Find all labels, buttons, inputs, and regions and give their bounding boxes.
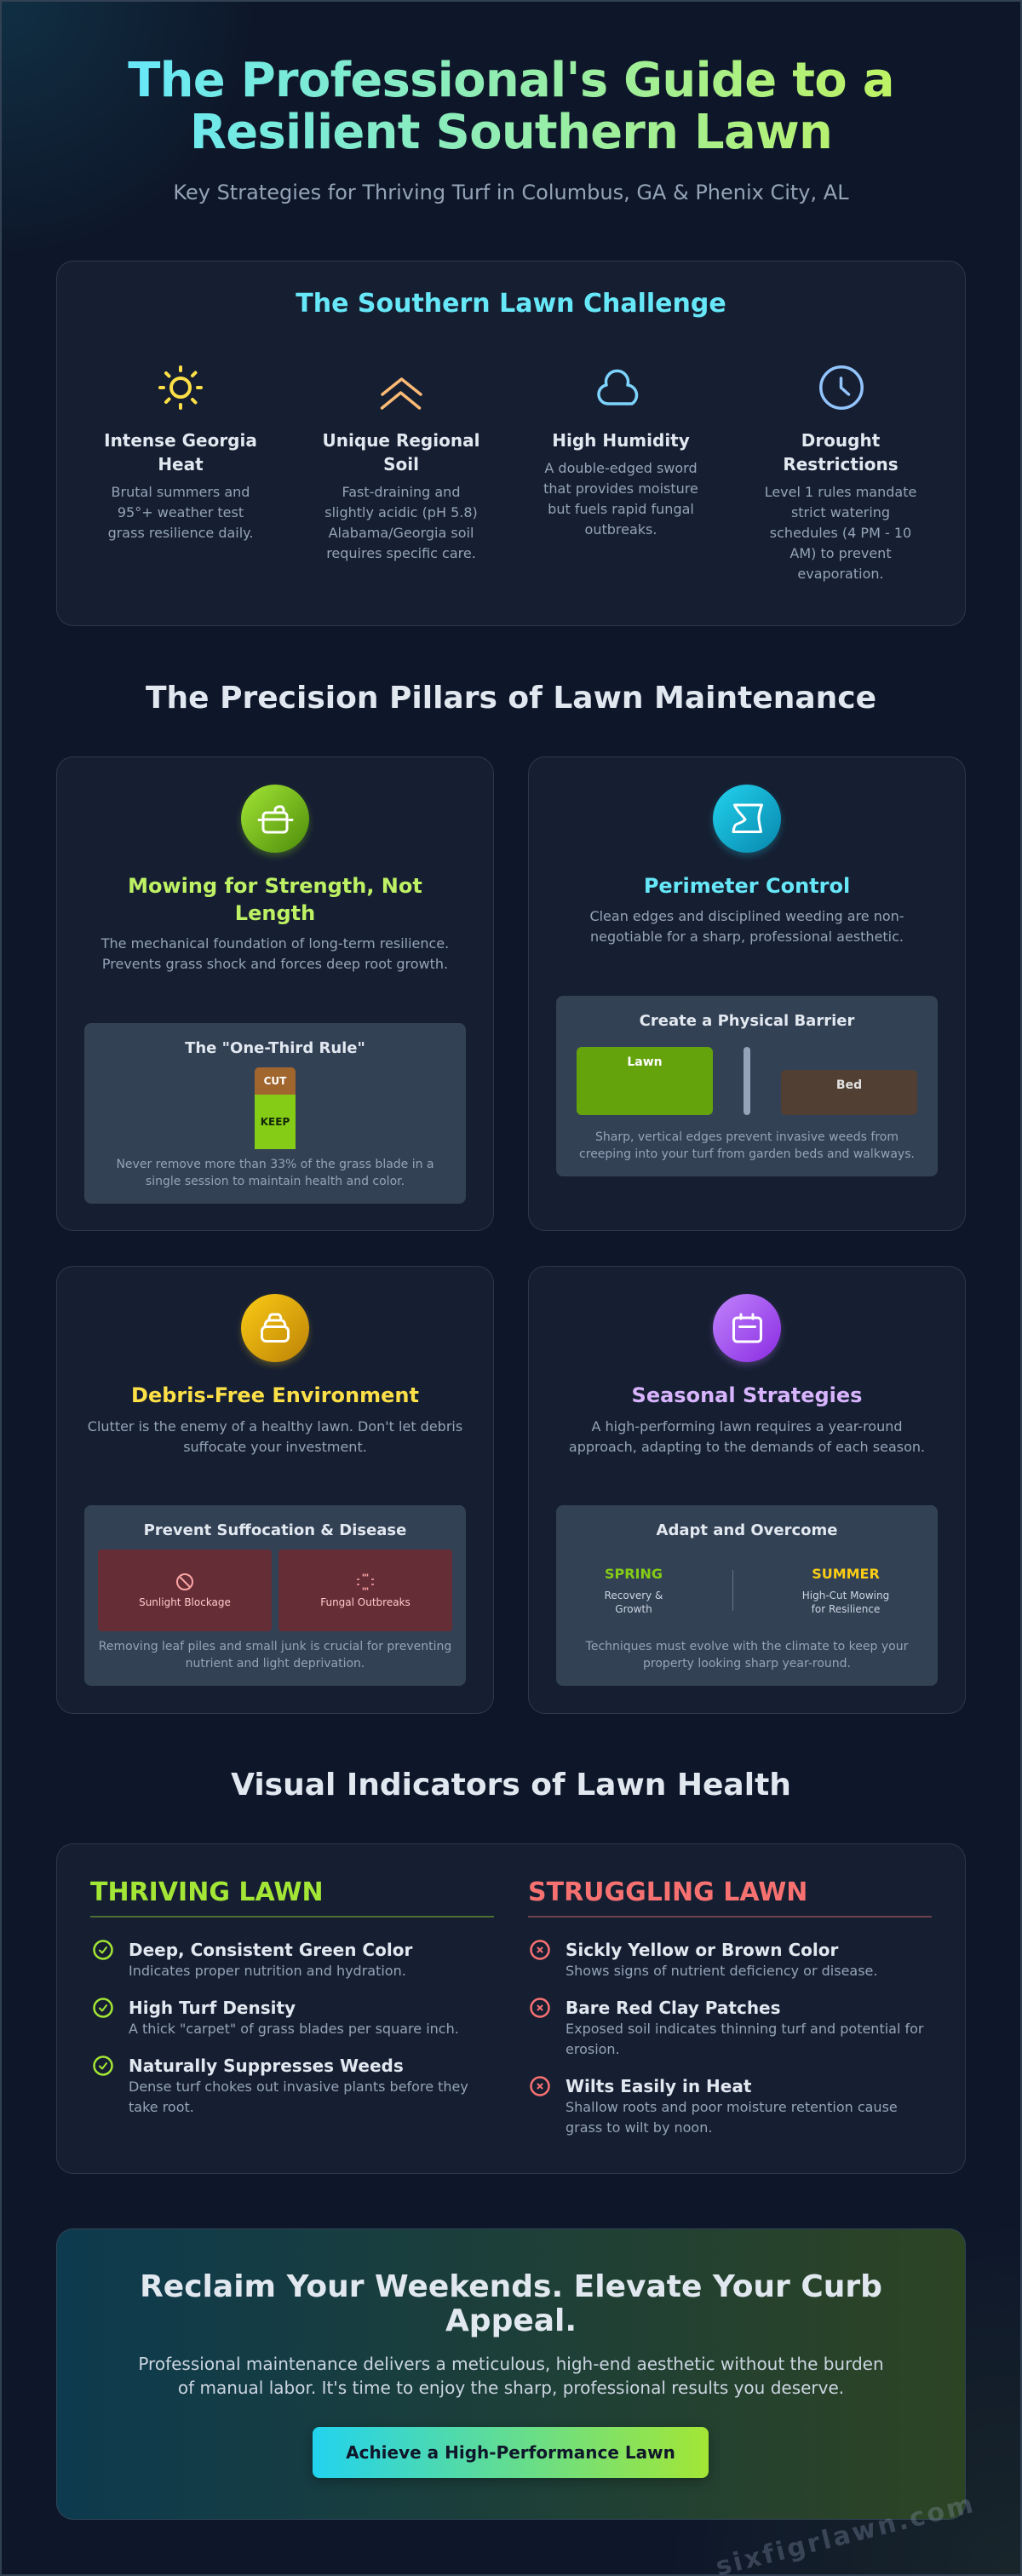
text: cta: Professional maintenance delivers a meticulous, high-end aesthetic without the burden [138,2354,884,2374]
indicator: suppresses weeds [93,2056,468,2115]
panel: lawn health comparison [56,1843,966,2174]
tile: fungal outbreaks [278,1550,452,1631]
button [313,2427,709,2478]
diagram title: Create a Physical Barrier [640,1012,854,1030]
description: perimeter: negotiable for a sharp, professional aesthetic. [590,929,904,945]
challenge item: drought: evaporation. [797,566,884,582]
caption: Never remove more than 33% of the grass blade in a [116,1158,434,1171]
diagram title: Adapt and Overcome [657,1521,837,1539]
icon: check [93,1998,113,2018]
cut segment: CUT [264,1075,286,1087]
caption: Techniques must evolve with the climate to keep your [586,1640,908,1653]
indicator: green color: Deep, Consistent Green Color [129,1940,412,1960]
description: seasonal: A high-performing lawn requires a year-round [591,1418,903,1435]
description: perimeter [589,908,904,945]
season: spring: Growth [615,1603,652,1615]
season: spring: SPRING [605,1566,663,1582]
panel: the southern lawn challenge [56,261,966,626]
indicator: turf density: High Turf Density [129,1998,296,2018]
heading: mowing: Mowing for Strength, Not [128,874,422,898]
challenge item: heat: grass resilience daily. [108,525,253,541]
caption: single session to maintain health and color. [146,1175,405,1188]
icon: bag [241,1294,309,1362]
tile: fungal outbreaks: Fungal Outbreaks [320,1596,411,1608]
challenge item: drought: strict watering [791,504,890,520]
bed block [781,1070,917,1115]
challenge item: drought: AM) to prevent [789,545,892,561]
challenge item: drought: Drought [801,430,880,451]
lawn block [577,1047,713,1115]
description: mowing [100,935,449,972]
challenge item: heat: Heat [158,454,204,474]
text: cta: of manual labor. It's time to enjoy the sharp, professional results you deserve. [178,2378,844,2398]
indicator: wilts in heat: grass to wilt by noon. [566,2119,712,2136]
description: mowing: Prevents grass shock and forces deep root growth. [102,956,448,972]
icon: edging [713,785,781,853]
challenge item: soil: Unique Regional [323,430,479,451]
icon: mower [241,785,309,853]
indicator: suppresses weeds: Naturally Suppresses Weeds [129,2056,404,2076]
panel: call to action [56,2228,966,2520]
icon: double chevron [380,377,422,410]
indicator: wilts in heat [530,2076,898,2136]
indicator: green color: Indicates proper nutrition and hydration. [129,1963,406,1979]
divider: seasons [732,1570,733,1611]
heading: cta [140,2269,882,2338]
icon: spore ring [357,1574,374,1590]
indicator: green color [93,1940,412,1979]
challenge item: heat: 95°+ weather test [118,504,244,520]
challenge item: soil: Soil [383,454,419,474]
challenge item: soil [323,377,479,561]
challenge item: drought: Level 1 rules mandate [765,484,916,500]
icon: cross [530,1998,550,2018]
heading: cta: Reclaim Your Weekends. Elevate Your Curb [140,2269,882,2304]
caption: creeping into your turf from garden beds and walkways. [579,1147,915,1161]
title: The Professional's Guide to a [128,53,894,108]
caption: nutrient and light deprivation. [186,1657,365,1670]
challenge item: heat [104,365,257,541]
season: spring: Recovery & [605,1590,663,1601]
icon: cross [530,1940,550,1960]
title [128,53,894,160]
icon: clock [819,365,864,410]
diagram title: Prevent Suffocation & Disease [144,1521,406,1539]
heading: debris: Debris-Free Environment [131,1383,419,1407]
diagram: one-third rule [84,1023,466,1204]
indicator: yellow color: Sickly Yellow or Brown Color [566,1940,838,1960]
panel: debris-free [56,1266,494,1714]
rule: struggling [528,1916,932,1918]
indicator: clay patches: erosion. [566,2041,620,2057]
challenge item: humidity: A double-edged sword [544,460,698,476]
indicator: suppresses weeds: take root. [129,2099,194,2115]
keep segment [255,1095,296,1149]
indicator: wilts in heat: Wilts Easily in Heat [566,2076,751,2096]
heading: thriving: THRIVING LAWN [90,1877,324,1907]
season: summer: High-Cut Mowing [802,1590,889,1601]
description: debris [88,1418,462,1455]
icon: cloud [597,370,639,405]
description: mowing: The mechanical foundation of long-term resilience. [101,935,449,952]
challenge item: soil: Alabama/Georgia soil [329,525,474,541]
challenge item: heat: Brutal summers and [112,484,250,500]
barrier [744,1047,750,1115]
icon: sun [158,365,203,410]
challenge item: humidity [543,370,698,538]
caption: Sharp, vertical edges prevent invasive weeds from [595,1130,899,1144]
indicator: clay patches: Exposed soil indicates thinning turf and potential for [566,2021,923,2037]
challenge item: soil: requires specific care. [326,545,476,561]
panel: mowing [56,756,494,1231]
challenge item: soil: Fast-draining and [342,484,460,500]
icon: check [93,2056,113,2076]
keep segment: KEEP [261,1116,290,1128]
heading: cta: Appeal. [445,2303,577,2338]
description: debris: suffocate your investment. [183,1439,367,1455]
indicator: clay patches: Bare Red Clay Patches [566,1998,781,2018]
challenge item: humidity: that provides moisture [543,480,698,497]
season: summer [802,1566,889,1615]
challenge item: humidity: High Humidity [552,430,690,451]
caption [586,1640,908,1670]
caption: Removing leaf piles and small junk is crucial for preventing [99,1640,451,1653]
icon: check [93,1940,113,1960]
season: spring [605,1566,663,1615]
indicator: turf density [93,1998,459,2037]
heading: visual indicators: Visual Indicators of Lawn Health [231,1768,791,1803]
season: summer: for Resilience [812,1603,880,1615]
subtitle: Key Strategies for Thriving Turf in Columbus, GA & Phenix City, AL [173,181,849,204]
indicator: yellow color: Shows signs of nutrient deficiency or disease. [566,1963,877,1979]
lawn block: Lawn [627,1055,663,1069]
column: struggling lawn [528,1877,932,2136]
cut segment [255,1067,296,1095]
heading: mowing: Length [235,901,315,925]
challenge item: soil: slightly acidic (pH 5.8) [324,504,478,520]
icon: blocked [176,1573,193,1590]
heading: perimeter: Perimeter Control [644,874,850,898]
title: Resilient Southern Lawn [190,105,832,160]
heading: challenge: The Southern Lawn Challenge [296,289,726,319]
grass blade: cut and keep [255,1067,296,1149]
caption: property looking sharp year-round. [643,1657,851,1670]
indicator: suppresses weeds: Dense turf chokes out invasive plants before they [129,2079,468,2095]
icon: calendar [713,1294,781,1362]
heading: mowing [128,874,422,925]
caption [99,1640,451,1670]
challenge item: drought [765,365,916,582]
description: seasonal [569,1418,925,1455]
indicator: yellow color [530,1940,877,1979]
tile: sunlight blockage: Sunlight Blockage [139,1596,231,1608]
challenge item: drought: Restrictions [783,454,899,474]
challenge item: humidity: outbreaks. [585,521,657,538]
season: summer: SUMMER [812,1566,880,1582]
indicator: clay patches [530,1998,923,2057]
diagram: physical barrier [556,996,938,1176]
heading: struggling: STRUGGLING LAWN [528,1877,807,1907]
diagram title: The "One-Third Rule" [185,1039,365,1057]
diagram: suffocation and disease [84,1505,466,1686]
heading: precision pillars: The Precision Pillars of Lawn Maintenance [146,681,876,716]
challenge item: humidity: but fuels rapid fungal [548,501,694,517]
column: thriving lawn [90,1877,494,2115]
challenge item: heat: Intense Georgia [104,430,257,451]
rule: thriving [90,1916,494,1918]
indicator: turf density: A thick "carpet" of grass blades per square inch. [129,2021,459,2037]
bed block: Bed [836,1078,862,1092]
button: Achieve a High-Performance Lawn [346,2442,675,2463]
caption [116,1158,434,1188]
tile: sunlight blockage [98,1550,272,1631]
panel: perimeter control [528,756,966,1231]
diagram: adapt and overcome [556,1505,938,1686]
description: seasonal: approach, adapting to the demands of each season. [569,1439,925,1455]
icon: cross [530,2076,550,2096]
description: debris: Clutter is the enemy of a healthy lawn. Don't let debris [88,1418,462,1435]
caption [579,1130,915,1161]
heading: seasonal: Seasonal Strategies [632,1383,862,1407]
challenge item: drought: schedules (4 PM - 10 [770,525,911,541]
text: cta [138,2354,884,2398]
description: perimeter: Clean edges and disciplined weeding are non- [589,908,904,924]
indicator: wilts in heat: Shallow roots and poor moisture retention cause [566,2099,898,2115]
panel: seasonal strategies [528,1266,966,1714]
